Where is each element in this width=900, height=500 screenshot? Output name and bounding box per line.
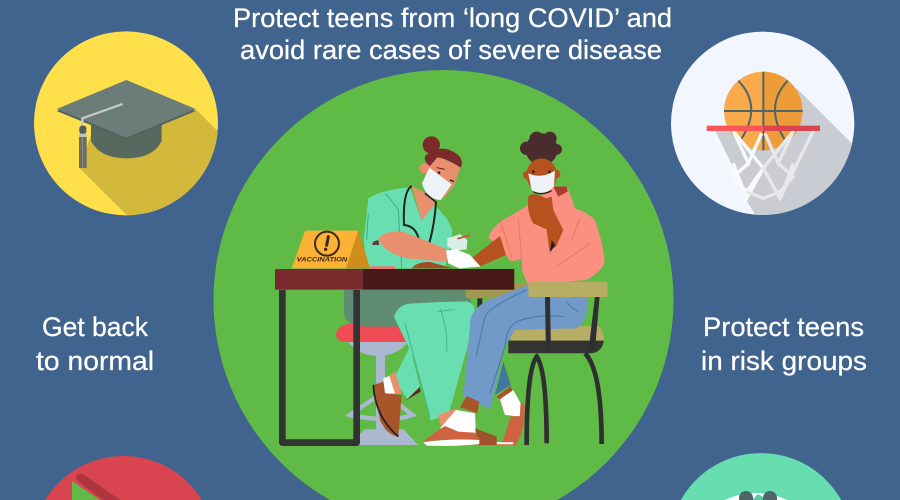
icon: basketball and hoop <box>671 32 857 222</box>
icon: red circle with play symbol <box>45 456 202 500</box>
label: protect teens in risk groups <box>701 312 867 376</box>
label: get back to normal <box>36 312 154 376</box>
label: protect teens in risk groups: in risk groups <box>701 346 867 376</box>
title <box>233 3 672 65</box>
illustration: nurse vaccinating a teen <box>275 132 608 446</box>
title: avoid rare cases of severe disease <box>240 35 662 65</box>
table <box>275 266 514 443</box>
central green circle <box>213 70 673 500</box>
icon: graduation cap <box>34 31 225 222</box>
label: get back to normal: to normal <box>36 346 154 376</box>
label: get back to normal: Get back <box>42 312 148 342</box>
label: protect teens in risk groups: Protect teens <box>703 312 864 342</box>
vaccination sign: VACCINATION <box>297 257 348 263</box>
icon: mint circle with white shape <box>681 453 841 500</box>
title: Protect teens from ‘long COVID’ and <box>233 3 672 33</box>
chair seat and legs <box>466 283 604 445</box>
chair back rail and uprights <box>528 282 608 353</box>
teen <box>423 132 605 446</box>
nurse <box>344 136 476 437</box>
vaccination sign <box>292 231 370 268</box>
nurse stool <box>336 324 418 445</box>
